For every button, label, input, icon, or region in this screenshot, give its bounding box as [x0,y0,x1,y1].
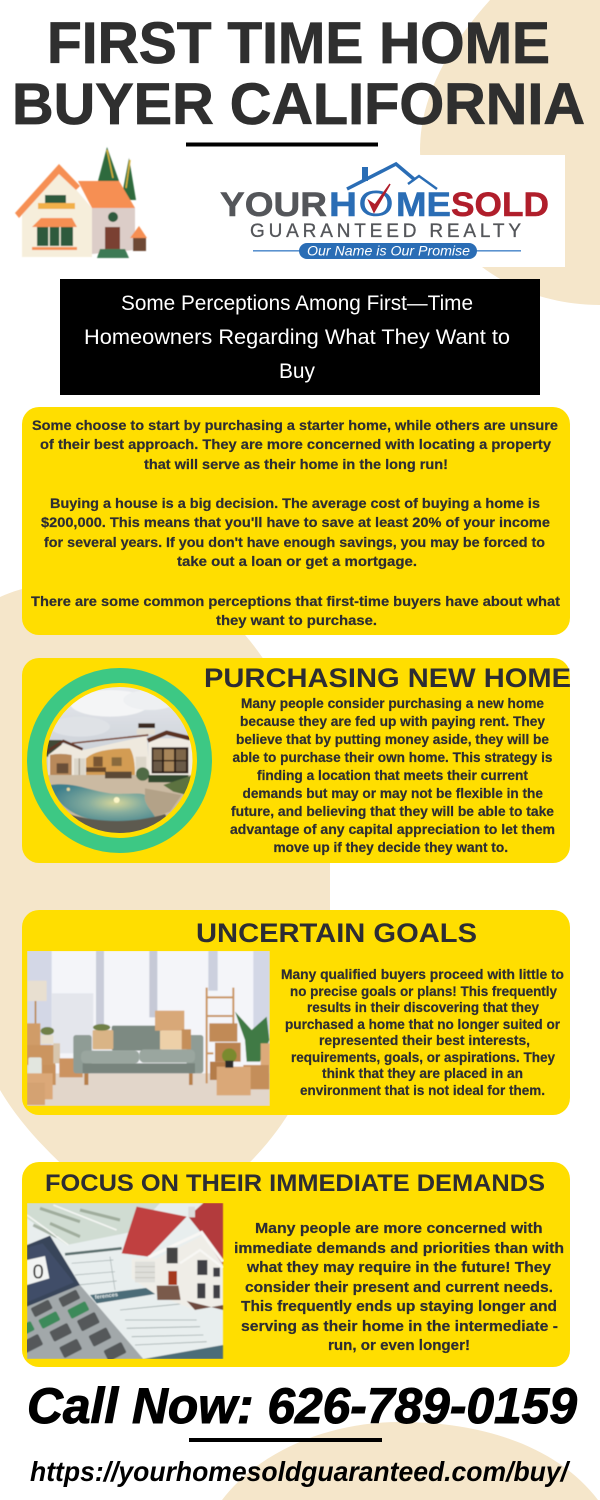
background blob: left [0,579,330,1172]
body text: consider their present and current needs. [245,1279,553,1296]
logo wordmark: H [329,186,357,224]
logo wordmark: SOLD [451,186,549,224]
heading: FOCUS ON THEIR IMMEDIATE DEMANDS [45,1170,545,1197]
subtitle banner: Homeowners Regarding What They Want to [84,326,510,349]
title: BUYER CALIFORNIA [12,72,585,137]
body text: This frequently ends up staying longer and [241,1298,557,1315]
panel: uncertain goals [22,910,570,1115]
logo wordmark [220,183,549,224]
body text: finding a location that meets their current [257,768,528,783]
intro paragraph 3: There are some common perceptions that first-time buyers have about what [31,593,560,609]
intro paragraph 2: $200,000. This means that you'll have to save at least 20% of your income [41,514,550,530]
body text [230,696,555,855]
body text: think that they are placed in an [322,1066,523,1081]
logo wordmark: O [358,183,394,224]
logo wordmark: ME [396,186,451,224]
subtitle banner [60,279,540,395]
intro paragraph 2: for several years. If you don't have enough savings, you may be forced to [44,534,545,550]
photo: calculator and model house: 0 [33,1261,44,1283]
body text: immediate demands and priorities than with [234,1240,564,1257]
body text: Many people are more concerned with [255,1220,542,1237]
intro paragraph 2: take out a loan or get a mortgage. [177,553,417,569]
photo: house with pool in green ring [34,676,204,846]
body text: advantage of any capital appreciation to let them [230,822,555,837]
photo: calculator and model house [18,1203,223,1362]
heading: PURCHASING NEW HOME [204,663,571,693]
body text [281,967,564,1098]
website url: https://yourhomesoldguaranteed.com/buy/ [30,1456,571,1487]
intro paragraph 3: they want to purchase. [216,612,377,628]
intro paragraph 1: that will serve as their home in the long run! [144,456,448,472]
body text: environment that is not ideal for them. [300,1083,545,1098]
intro paragraph 1: Some choose to start by purchasing a starter home, while others are unsure [32,417,558,433]
logo roof [347,164,437,189]
body text: represented their best interests, [319,1033,530,1048]
body text: serving as their home in the intermediate - [241,1318,558,1335]
logo: Your Home Sold Guaranteed Realty: Our Name is Our Promise [307,242,470,258]
logo wordmark: YOUR [220,186,327,224]
body text: run, or even longer! [328,1337,470,1354]
panel: introduction [22,407,570,635]
icon: house illustration [15,147,147,258]
panel: focus on immediate demands [18,1162,570,1367]
heading: UNCERTAIN GOALS [196,918,477,948]
logo: Your Home Sold Guaranteed Realty: GUARANTEED REALTY [250,221,521,242]
body text: believe that by putting money aside, they will be [236,732,549,747]
subtitle banner: Some Perceptions Among First—Time [121,292,473,315]
subtitle banner: Buy [279,360,315,383]
title: FIRST TIME HOME [47,11,550,76]
background blob: bottom [222,1422,598,1500]
body text: able to purchase their own home. This strategy is [232,750,552,765]
body text: requirements, goals, or aspirations. They [291,1050,555,1065]
background blob: top right [420,0,600,305]
photo: living room with moving boxes [27,951,270,1106]
title [12,11,585,137]
intro paragraph 1 [32,417,558,472]
body text: move up if they decide they want to. [274,840,508,855]
intro paragraph 2: Buying a house is a big decision. The average cost of buying a home is [50,495,540,511]
body text: future, and believing that they will be able to take [231,804,554,819]
photo: calculator and model house: ferences [95,1292,118,1301]
body text: purchased a home that no longer suited or [285,1017,561,1032]
intro paragraph 1: of their best approach. They are more concerned with locating a property [40,436,551,452]
panel: purchasing new home [22,658,571,863]
intro paragraph 3 [31,593,560,628]
body text: Many people consider purchasing a new home [241,696,544,711]
body text [234,1220,564,1354]
call to action phone number: Call Now: 626-789-0159 [27,1378,577,1434]
body text: because they are fed up with paying rent. They [240,714,545,729]
body text: demands but may or may not be flexible in the [242,786,543,801]
body text: what they may require in the future! They [246,1259,552,1276]
body text: no precise goals or plans! This frequently [290,984,557,999]
body text: Many qualified buyers proceed with little to [281,967,564,982]
intro paragraph 2 [41,495,550,569]
body text: results in their discovering that they [307,1000,539,1015]
logo: Your Home Sold Guaranteed Realty [220,155,565,267]
